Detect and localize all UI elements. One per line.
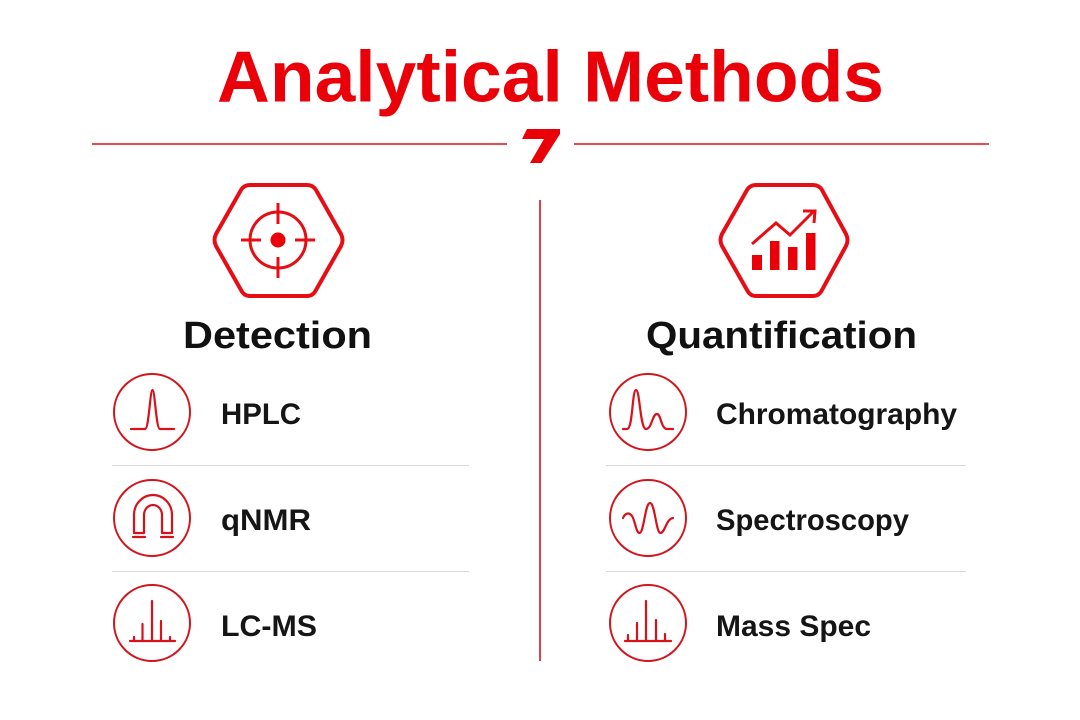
title divider with seven mark	[92, 129, 989, 163]
item: HPLC	[114, 374, 301, 450]
panel: quantification	[606, 185, 966, 661]
item: mass spec: Mass Spec	[716, 610, 871, 643]
item: chromatography	[610, 374, 957, 450]
item: mass spec	[610, 585, 871, 661]
item: spectroscopy: Spectroscopy	[716, 504, 909, 537]
icon: growth chart in hexagon	[720, 185, 848, 296]
heading: detection: Detection	[183, 315, 372, 357]
item: LC-MS	[114, 585, 317, 661]
item: LC-MS: LC-MS	[221, 610, 317, 643]
heading: quantification: Quantification	[646, 315, 917, 357]
panel: detection	[112, 185, 469, 661]
item: HPLC: HPLC	[221, 398, 301, 431]
item: spectroscopy	[610, 480, 909, 556]
centre divider	[539, 200, 541, 661]
item: chromatography: Chromatography	[716, 398, 957, 431]
item: qNMR	[114, 480, 311, 556]
icon: target in hexagon	[214, 185, 342, 296]
item: qNMR: qNMR	[221, 504, 311, 537]
title: Analytical Methods	[217, 38, 884, 118]
